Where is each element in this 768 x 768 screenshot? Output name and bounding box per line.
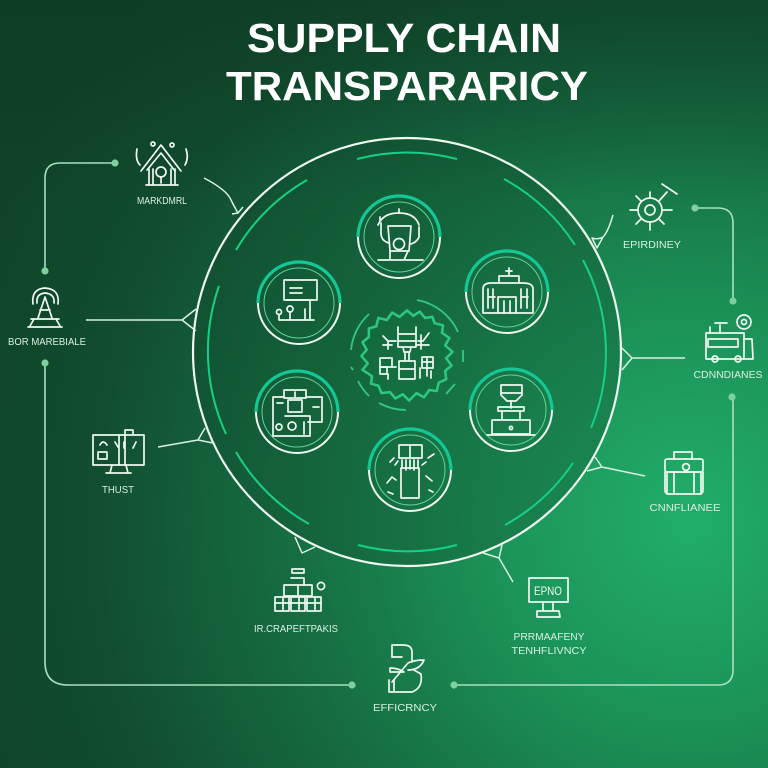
main circle	[193, 138, 621, 566]
icon: container with sparks	[387, 445, 434, 498]
icon: press machine	[487, 385, 535, 435]
jagged green ring	[361, 310, 453, 401]
title	[226, 15, 588, 109]
icon: hook and leaf	[389, 645, 424, 692]
node: bottom	[369, 429, 451, 511]
icon: monitor with text	[529, 578, 568, 617]
item: top left marketplace	[136, 142, 187, 207]
item: left trust	[93, 430, 144, 496]
label: CDNNDIANES	[694, 369, 762, 381]
icon: stacked boxes	[275, 569, 325, 611]
node: top	[358, 196, 440, 278]
item: bottom efficiency	[373, 645, 437, 714]
title: TRANSPARARICY	[226, 63, 588, 109]
node: upper right	[466, 251, 548, 333]
icon: bag	[665, 452, 703, 494]
item: right logistics	[694, 315, 762, 381]
node: upper left	[258, 262, 340, 344]
icon: processing unit	[273, 390, 322, 436]
connector: bottom left bracket	[41, 359, 356, 689]
label: BOR MAREBIALE	[8, 336, 86, 348]
label: IR.CRAPEFTPAKIS	[254, 623, 338, 635]
label: CNNFLIANEE	[650, 502, 720, 514]
node: lower left	[256, 371, 338, 453]
item: bottom right transparency: EPNO	[534, 584, 562, 598]
icon: monitor with plants	[276, 280, 317, 320]
outer dashed arcs	[351, 300, 463, 410]
label: TENHFLIVNCY	[512, 645, 586, 657]
icon: factory	[483, 268, 533, 313]
item: left raw materials	[8, 288, 86, 348]
item: bottom left packages	[254, 569, 338, 635]
icon: house	[136, 142, 187, 185]
icon: monitor	[93, 430, 144, 473]
icon: hopper on stand	[378, 209, 423, 260]
label: EFFICRNCY	[373, 702, 437, 714]
connector: bottom right bracket	[450, 393, 736, 689]
item: right compliance	[650, 452, 720, 514]
inner segmented green ring	[208, 153, 606, 551]
connector: top right bracket	[691, 204, 737, 305]
item: bottom right transparency	[512, 578, 586, 657]
icon: tower	[28, 288, 62, 327]
icon: supply network	[380, 327, 433, 379]
spokes from the main circle to the outer items	[86, 178, 685, 582]
connector: top left bracket	[41, 159, 119, 275]
icon: gear with satellite	[630, 184, 677, 230]
node: lower right	[470, 369, 552, 451]
title: SUPPLY CHAIN	[247, 15, 561, 61]
item: top right efficiency	[623, 184, 681, 251]
center hub	[351, 300, 463, 410]
label: MARKDMRL	[137, 195, 187, 207]
label: THUST	[102, 484, 135, 496]
label: PRRMAAFENY	[514, 631, 584, 643]
label	[512, 631, 586, 657]
label: EPIRDINEY	[623, 239, 681, 251]
icon: truck	[706, 315, 753, 362]
